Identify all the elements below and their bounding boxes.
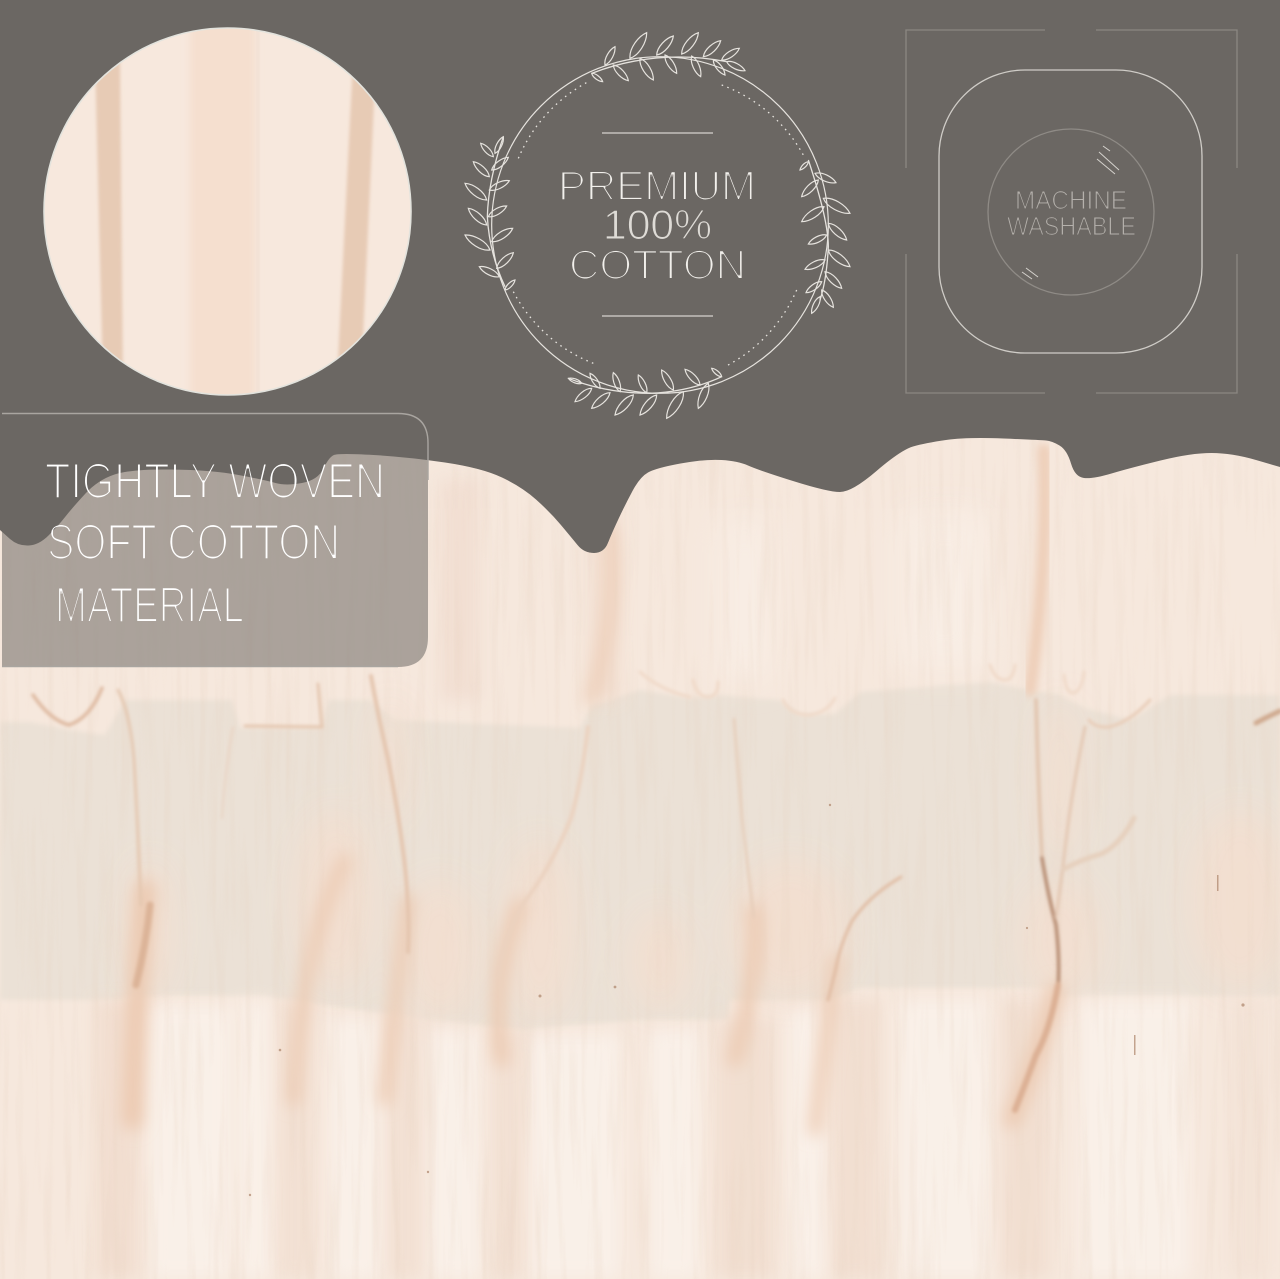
- callout text: [45, 453, 385, 633]
- badge: machine washable: [906, 30, 1237, 393]
- callout: tightly woven soft cotton: [2, 413, 428, 667]
- callout text: TIGHTLY WOVEN: [45, 453, 385, 509]
- wreath divider rules: [602, 133, 713, 316]
- wreath text: PREMIUM: [558, 162, 756, 209]
- fabric: soft vertical shading: [98, 486, 1046, 1276]
- shine marks: [1022, 146, 1119, 279]
- wreath percentage text: 100%: [603, 201, 712, 248]
- fabric swatch circle: [44, 20, 411, 400]
- rounded square outline: [939, 70, 1202, 353]
- fabric: diffuse fold shadows: [132, 530, 1056, 1130]
- badge: premium 100% cotton wreath: [463, 30, 852, 421]
- inner circle: [988, 129, 1154, 295]
- callout border: [2, 414, 428, 666]
- wreath text: [558, 162, 756, 288]
- wreath ring and leaves: [463, 30, 852, 421]
- fabric: ruffle crease at seam: [1030, 450, 1045, 690]
- fabric: fold creases: [33, 676, 1280, 1110]
- fabric: ruffle scallops: [640, 665, 1084, 715]
- corner brackets: [906, 30, 1237, 393]
- wreath text: COTTON: [569, 241, 746, 288]
- callout text: MATERIAL: [55, 577, 244, 633]
- fabric: woven streak texture: [182, 440, 1198, 1279]
- fabric: light columns: [150, 1000, 1190, 1279]
- fabric: yarn flecks: [249, 804, 1245, 1196]
- translucent callout panel: [2, 413, 428, 667]
- fabric: pink warmth around folds inside band: [128, 700, 1280, 1020]
- machine washable text: WASHABLE: [1007, 211, 1136, 241]
- machine washable text: MACHINE: [1015, 185, 1127, 215]
- fabric: grey lined band: [0, 682, 1280, 1030]
- callout text: SOFT COTTON: [47, 514, 340, 570]
- panel: curtain fabric photo: [0, 430, 1280, 1279]
- machine washable text: [1007, 185, 1136, 241]
